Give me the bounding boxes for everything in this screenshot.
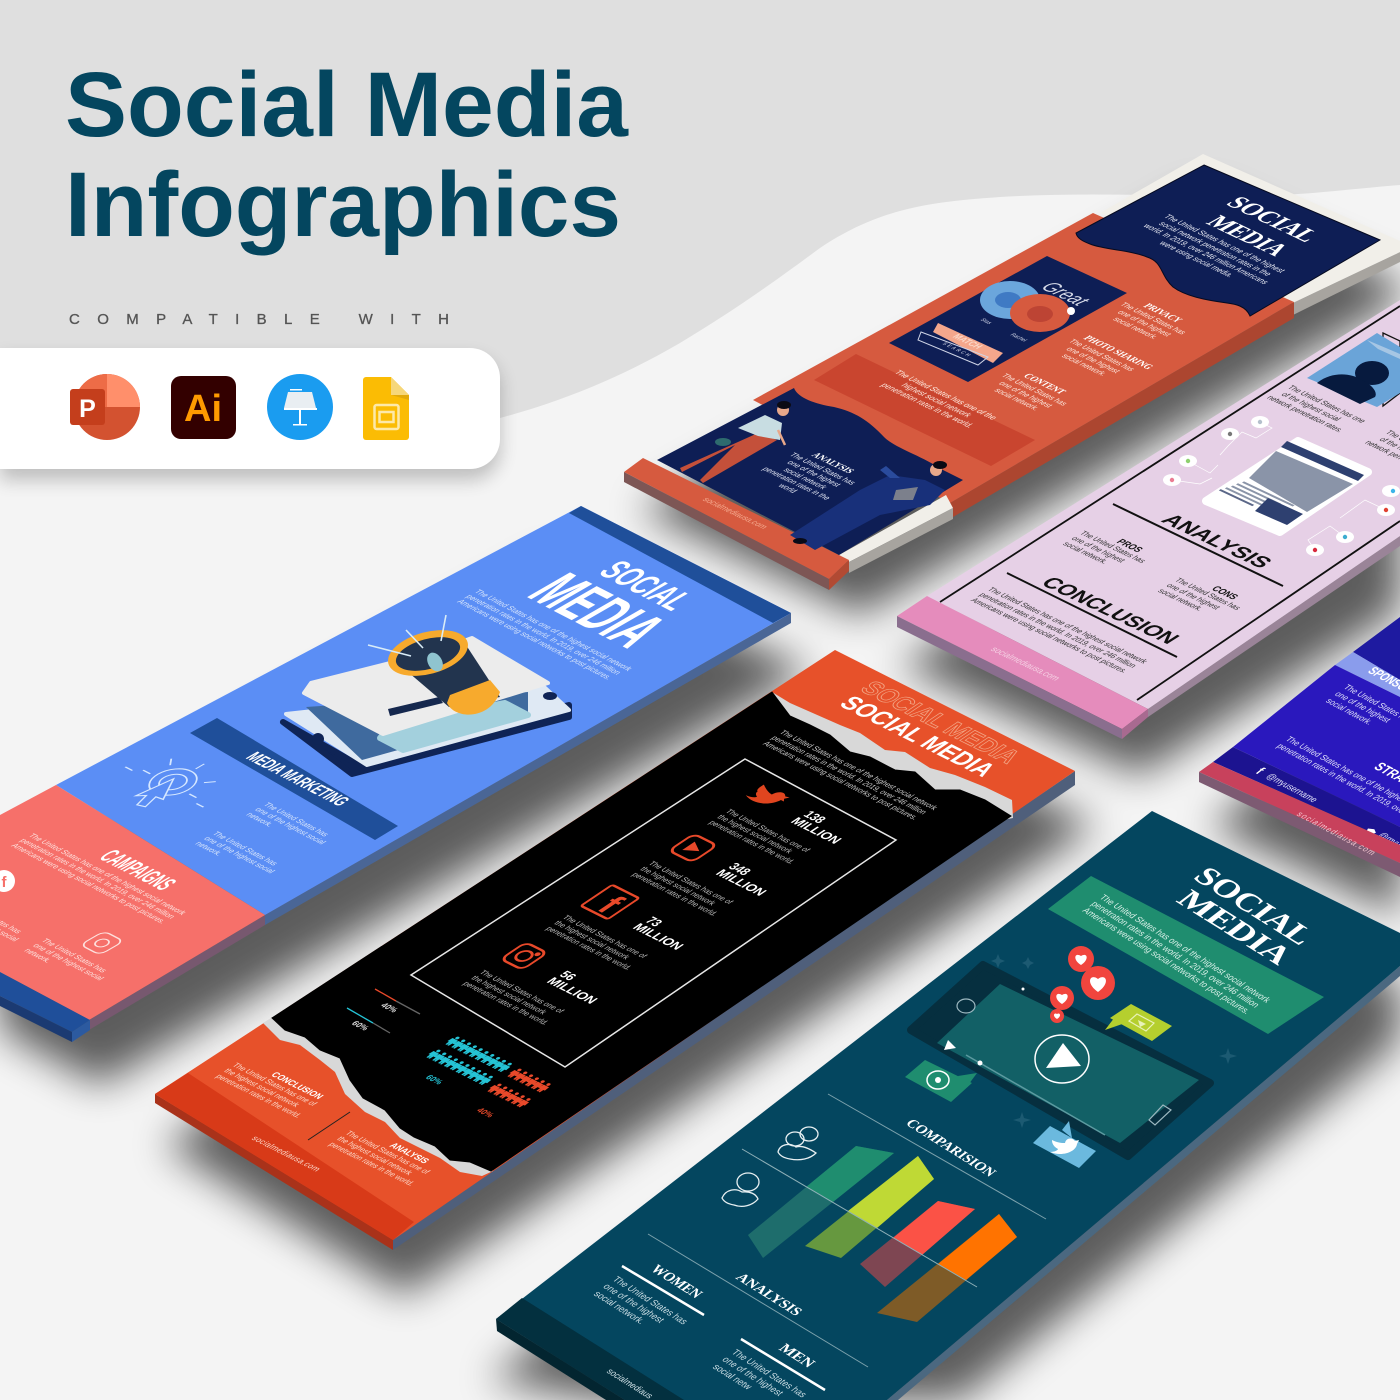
heading: comparision: COMPARISION <box>902 1116 1000 1179</box>
conclusion text: The United States has one of the highest social network <box>985 586 1150 665</box>
bottom strip <box>0 972 90 1032</box>
feature: content: social network. <box>992 387 1042 412</box>
stat: facebook: penetration rates in the world. <box>544 925 634 972</box>
callout box <box>814 354 1035 466</box>
green intro box: Americans were using social networks to post pictures. <box>1080 906 1253 1016</box>
blue face <box>56 506 791 915</box>
heading: campaigns: CAMPAIGNS <box>93 846 183 894</box>
illustration: woman <box>680 401 791 483</box>
chart: bars <box>742 1146 1017 1322</box>
analysis <box>326 1123 443 1187</box>
torn paper bottom <box>263 1000 493 1176</box>
board: teal infographic <box>496 811 1400 1400</box>
bottom orange strip <box>624 458 849 579</box>
heading: social: SOCIAL <box>589 556 702 616</box>
conclusion: penetration rates in the world. <box>213 1073 304 1119</box>
conclusion text: Americans were using social networks to post pictures. <box>968 597 1130 674</box>
pros: PROS <box>1113 538 1146 555</box>
intro text: penetration rates in the world. In 2019, over 246 million <box>769 734 929 816</box>
campaigns text left <box>0 898 30 948</box>
pros <box>1061 524 1157 575</box>
analysis: ANALYSIS <box>387 1141 432 1165</box>
media marketing band <box>190 718 398 840</box>
pink footer <box>897 596 1148 729</box>
board: black infographic <box>155 650 1075 1250</box>
feature: photo sharing: The United States has <box>1066 338 1137 373</box>
green intro box: The United States has one of the highest social network <box>1097 893 1274 1005</box>
heading: social: SOCIAL <box>1186 861 1323 950</box>
stat: youtube: MILLION <box>712 867 770 898</box>
light stripe <box>1335 652 1400 697</box>
title: Infographics <box>65 154 621 256</box>
feature: privacy: one of the highest <box>1115 309 1174 338</box>
women column: social network. <box>591 1289 647 1326</box>
card shadow <box>0 358 500 480</box>
pros: social network. <box>1061 540 1111 565</box>
slate side <box>887 966 1400 1400</box>
feature: privacy <box>1100 295 1199 346</box>
feature: content: The United States has <box>999 372 1070 407</box>
intro text: The United States has one of the highest social network <box>472 588 634 672</box>
conclusion text: penetration rates in the world. In 2019, over 246 million <box>977 591 1139 669</box>
icon: illustrator: Ai <box>184 388 222 430</box>
callout box: The United States has one of the <box>892 369 1000 421</box>
cons <box>1156 571 1252 622</box>
heading: media: MEDIA <box>1169 884 1301 971</box>
stat: facebook: 73 <box>642 915 666 929</box>
stat: instagram: penetration rates in the world. <box>461 980 551 1027</box>
phone screen <box>889 256 1127 382</box>
url: socialmediaus <box>604 1367 656 1400</box>
stat: facebook: the highest social network <box>552 919 632 961</box>
men column: one of the highest <box>720 1355 786 1398</box>
campaigns text: The United States has one of the highest social network <box>26 832 188 916</box>
url: socialmediausa.com <box>988 645 1063 682</box>
instagram text: The United States has <box>39 937 109 974</box>
intro text: were using social media. <box>1156 239 1236 279</box>
feature: privacy: The United States has <box>1118 301 1189 336</box>
stat: facebook: MILLION <box>629 921 687 952</box>
stat: instagram: the highest social network <box>469 974 549 1016</box>
people labels: 40% <box>474 1106 497 1119</box>
analysis: The United States has one of <box>343 1129 433 1176</box>
instagram text <box>22 937 115 987</box>
section: analysis: penetration rates in the <box>760 466 833 501</box>
divider lines <box>648 1094 1046 1367</box>
slate side <box>393 771 1075 1250</box>
intro text: The United States has one of the highest <box>1161 213 1288 274</box>
pros: one of the highest <box>1069 535 1128 564</box>
stat: instagram <box>461 942 612 1027</box>
facebook handle: f <box>1252 765 1269 777</box>
icon: keynote <box>267 374 333 440</box>
intro text: Americans were using social networks to post pictures. <box>455 598 614 681</box>
campaigns text: Americans were using social networks to post pictures. <box>9 842 168 925</box>
women column <box>591 1262 706 1341</box>
torn paper top <box>772 692 1013 840</box>
people labels: 60% <box>423 1073 446 1086</box>
sponsored text: one of the highest <box>1332 689 1394 724</box>
top strip <box>569 506 791 623</box>
callout box: highest social network <box>899 381 975 419</box>
phone screen: Stas <box>978 318 993 325</box>
stat: youtube: penetration rates in the world. <box>630 871 720 918</box>
cons: The United States has <box>1172 577 1243 611</box>
red footer <box>1199 762 1400 863</box>
facebook handle: @myusername <box>1264 772 1320 804</box>
board: blue infographic <box>0 506 791 1042</box>
heading: conclusion: CONCLUSION <box>1035 574 1184 648</box>
phone illustration <box>911 965 1210 1156</box>
feature: content <box>981 366 1081 417</box>
section: analysis: ANALYSIS <box>808 451 857 475</box>
board: lilac infographic <box>897 300 1400 739</box>
icon: men outline <box>778 1127 818 1160</box>
profile caption <box>1265 383 1369 436</box>
pros: The United States has <box>1077 530 1148 564</box>
intro text: penetration rates in the world. In 2019, over 246 million <box>463 593 623 676</box>
title: Social Media <box>65 54 629 156</box>
marketing text one: The United States has <box>261 801 331 838</box>
section: analysis <box>751 445 870 506</box>
marketing text two: network. <box>193 840 225 857</box>
phone screen: MATCH <box>950 333 985 350</box>
percent bar: 40 <box>375 989 420 1014</box>
heading: analysis: ANALYSIS <box>732 1270 806 1318</box>
lilac face <box>927 300 1400 709</box>
url: socialmediausa.com <box>249 1134 324 1173</box>
intro text: The United States has one of the highest social network <box>777 729 940 812</box>
stat: facebook: The United States has one of <box>560 914 650 960</box>
green intro box <box>1048 876 1324 1034</box>
people labels <box>423 1073 497 1119</box>
compatible with label: COMPATIBLE WITH <box>69 311 449 328</box>
sponsored text: social network. <box>1323 696 1376 726</box>
stat: facebook <box>544 885 698 972</box>
illustration: phone and megaphone <box>283 615 569 774</box>
campaigns text: penetration rates in the world. In 2019, over 246 million <box>17 837 177 920</box>
marketing text one <box>244 801 337 851</box>
network icons <box>1163 416 1400 556</box>
feature: photo sharing: one of the highest <box>1064 346 1123 375</box>
icon: powerpoint <box>70 374 140 440</box>
section: analysis: one of the highest <box>785 459 844 488</box>
facebook handle <box>1252 765 1322 805</box>
section: analysis: world <box>775 482 800 494</box>
stat: youtube: the highest social network <box>638 865 718 907</box>
men column <box>710 1339 825 1400</box>
dark upper region <box>1353 617 1400 680</box>
intro text <box>1131 212 1290 291</box>
title <box>65 54 629 256</box>
sponsored text <box>1323 683 1400 738</box>
white frame <box>411 759 896 1067</box>
orange panel <box>753 213 1294 503</box>
heading: analysis: ANALYSIS <box>1155 511 1277 572</box>
media marketing band: MEDIA MARKETING <box>241 750 354 809</box>
bubble: whatsapp <box>905 1060 977 1102</box>
stat: instagram: MILLION <box>543 975 601 1006</box>
phone screen: SEARCH <box>940 342 974 358</box>
dark bottom band <box>155 1073 414 1240</box>
stat: instagram: 56 <box>556 969 580 983</box>
cons: social network. <box>1156 587 1206 612</box>
heading: social media <box>1199 193 1325 260</box>
board: navy and orange infographic <box>624 154 1400 590</box>
marketing text two <box>193 830 286 880</box>
conclusion: The United States has one of <box>230 1061 320 1108</box>
feature: content: CONTENT <box>1020 372 1069 396</box>
heading: social media: SOCIAL <box>1219 193 1325 246</box>
teal face <box>496 811 1400 1400</box>
percent bar: 60 <box>347 1008 390 1033</box>
icon: facebook circle: f <box>2 874 8 891</box>
analysis: the highest social network <box>335 1135 415 1177</box>
section: analysis: social network <box>781 467 829 490</box>
hearts <box>1050 946 1115 1023</box>
dark footer band <box>1213 747 1400 845</box>
feature: content: one of the highest <box>996 380 1056 409</box>
stars <box>991 954 1237 1128</box>
stat: youtube: 348 <box>725 861 754 878</box>
stat: instagram: The United States has one of <box>477 969 567 1015</box>
cons: CONS <box>1208 585 1241 602</box>
icon: facebook circle <box>0 870 15 892</box>
instagram text: one of the highest social <box>30 942 106 982</box>
url: socialmediausa.com <box>700 496 771 530</box>
blue side <box>265 613 791 925</box>
marketing text one: network. <box>244 811 276 828</box>
stat: youtube <box>630 834 781 918</box>
tablet illustration <box>1206 441 1368 532</box>
orange face <box>155 650 1075 1240</box>
intro text: social network penetration rates in the <box>1156 220 1274 277</box>
cons: one of the highest <box>1164 582 1223 611</box>
cream sheet <box>1100 154 1400 303</box>
analysis: penetration rates in the world. <box>326 1141 417 1187</box>
instagram text: network. <box>22 947 54 964</box>
compatibility card <box>0 348 500 469</box>
icon: women outline <box>722 1173 759 1206</box>
illustration: man <box>790 461 947 550</box>
men column: MEN <box>775 1341 819 1370</box>
heading: social media: MEDIA <box>1199 212 1294 260</box>
phone screen: Rachel <box>1008 333 1028 343</box>
conclusion <box>213 1055 330 1119</box>
icon: google slides <box>363 377 409 440</box>
frame lines <box>940 306 1400 602</box>
indigo body <box>1233 665 1400 827</box>
people chart <box>425 1035 553 1108</box>
profile caption: of the highest social <box>1279 391 1343 423</box>
divider lines <box>1113 504 1283 586</box>
bubble: twitter <box>1033 1121 1096 1168</box>
intro text: world. In 2019, over 246 million Americans <box>1140 222 1271 285</box>
green intro box: penetration rates in the world. In 2019, over 246 million <box>1089 899 1262 1009</box>
stat: twitter: MILLION <box>787 815 845 846</box>
men column: social netw <box>710 1362 755 1391</box>
conclusion: CONCLUSION <box>269 1070 326 1101</box>
orange side <box>950 302 1294 517</box>
marketing text one: one of the highest social <box>252 806 328 846</box>
dark footer band <box>496 1298 684 1400</box>
heading: outline social media: SOCIAL MEDIA <box>853 677 1027 768</box>
cream lower strip <box>839 495 953 562</box>
section: analysis: The United States has <box>787 451 858 486</box>
heading: social media: SOCIAL MEDIA <box>832 692 1002 781</box>
icon: click cursor <box>96 744 243 824</box>
stat: facebook: f <box>588 891 633 919</box>
profile caption: The United States has one <box>1285 384 1369 425</box>
url: socialmediausa.com <box>1294 810 1379 857</box>
stat: twitter: The United States has one of <box>723 808 813 854</box>
top navy wave <box>1076 165 1380 316</box>
board: indigo infographic <box>1199 617 1400 877</box>
women column: WOMEN <box>647 1262 706 1301</box>
heading: media: MEDIA <box>511 564 684 657</box>
black face <box>272 692 1011 1171</box>
board side <box>1293 252 1400 315</box>
icon: instagram <box>80 931 124 955</box>
stat: twitter: the highest social network <box>715 813 795 855</box>
intro text: Americans were using social networks to post pictures. <box>761 740 921 821</box>
callout box: penetration rates in the world. <box>878 381 977 429</box>
feature: privacy: PRIVACY <box>1140 302 1185 324</box>
feature: photo sharing <box>1049 332 1156 386</box>
stat: youtube: The United States has one of <box>646 860 736 906</box>
profile picture <box>1307 333 1400 407</box>
bubble: video <box>1105 1004 1172 1041</box>
feature: privacy: social network. <box>1111 316 1161 341</box>
profile caption: network penetration rates. <box>1265 394 1346 434</box>
percent bar: 60: 60% <box>349 1019 372 1032</box>
icon: powerpoint: P <box>79 395 96 423</box>
conclusion: the highest social network <box>222 1067 302 1109</box>
feature: photo sharing: PHOTO SHARING <box>1080 334 1156 371</box>
lilac right side <box>1148 536 1400 717</box>
coral panel <box>0 785 265 1020</box>
phone screen: Great <box>1035 279 1094 309</box>
feature: photo sharing: social network. <box>1059 353 1110 377</box>
stat: twitter: penetration rates in the world. <box>707 819 797 866</box>
stat: twitter <box>707 783 856 866</box>
marketing text two: The United States has <box>210 830 280 867</box>
percent bar: 40: 40% <box>378 1001 401 1014</box>
marketing text two: one of the highest social <box>201 835 277 875</box>
men column: The United States has <box>729 1348 809 1399</box>
icon: illustrator <box>171 376 236 439</box>
women column: one of the highest <box>601 1282 667 1325</box>
background wave <box>0 0 1400 445</box>
stat: twitter: 138 <box>800 809 829 826</box>
women column: The United States has <box>610 1275 690 1326</box>
twitter handle <box>1364 825 1400 863</box>
bottom navy wave <box>657 388 963 555</box>
